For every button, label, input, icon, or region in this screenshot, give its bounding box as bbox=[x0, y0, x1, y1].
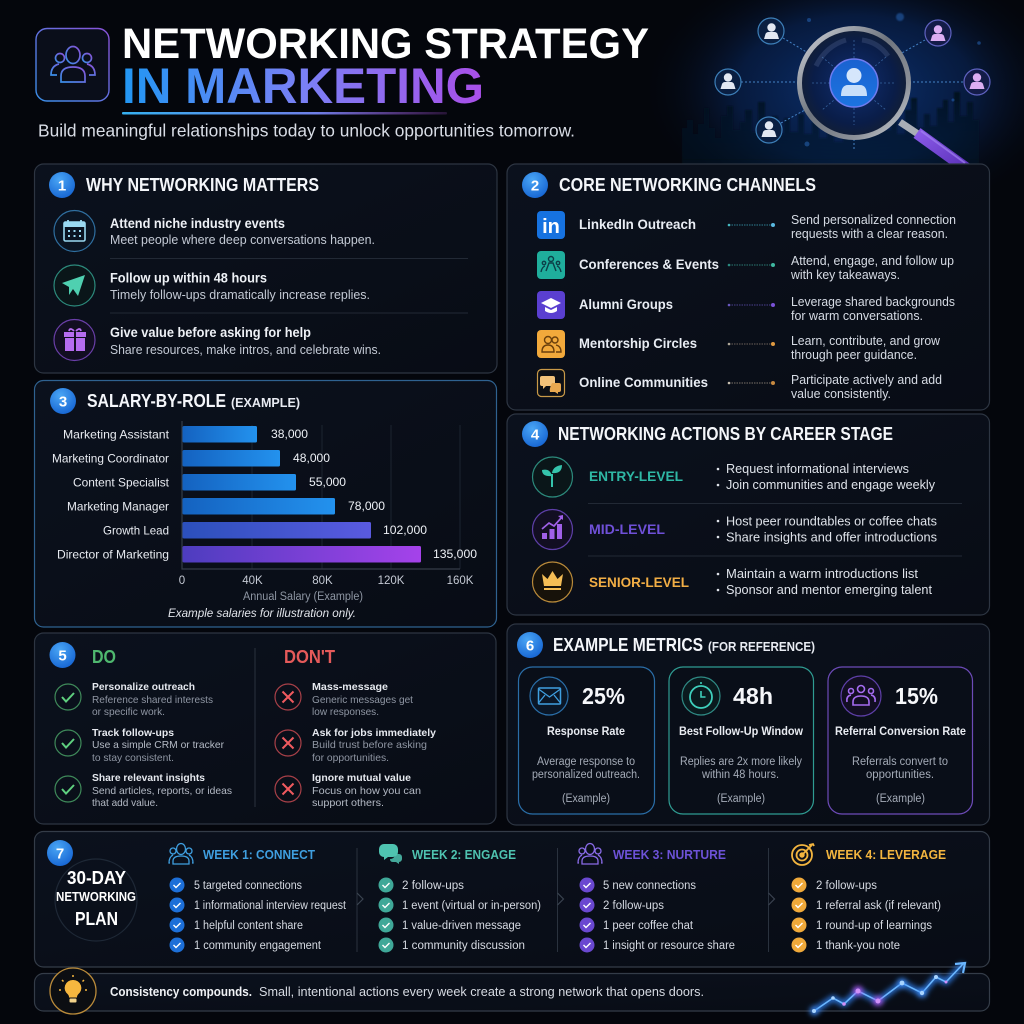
week 1 checklist: 1 informational interview request bbox=[194, 900, 347, 912]
do: share: Share relevant insights bbox=[92, 772, 205, 784]
week 3 checklist: 5 new connections bbox=[603, 880, 696, 892]
bullets: Join communities and engage weekly bbox=[726, 477, 935, 492]
week 3 checklist: 1 insight or resource share bbox=[603, 940, 735, 952]
week 1 column: WEEK 1: CONNECT bbox=[203, 848, 315, 862]
week 1 checklist: 5 targeted connections bbox=[194, 880, 302, 892]
row: mentorship: through peer guidance. bbox=[791, 348, 917, 362]
row: LinkedIn: requests with a clear reason. bbox=[791, 227, 948, 241]
metric card: follow-up window: Replies are 2x more likely bbox=[680, 756, 802, 768]
row: alumni bbox=[537, 291, 955, 323]
don't: mass message: Mass-message bbox=[312, 681, 388, 693]
week 3 checklist bbox=[580, 878, 735, 952]
badge 6 bbox=[517, 632, 543, 658]
heading: CORE NETWORKING CHANNELS bbox=[559, 175, 816, 195]
icon: people bbox=[169, 844, 193, 864]
heading line 2: IN MARKETING bbox=[122, 58, 484, 114]
panel 3: salary by role bbox=[34, 380, 496, 627]
row: entry level bbox=[532, 457, 935, 497]
item: attend events: Attend niche industry events bbox=[110, 216, 285, 231]
row: mentorship: Mentorship Circles bbox=[579, 335, 697, 351]
icon: target bbox=[792, 844, 814, 865]
icon: sprout bbox=[532, 457, 572, 497]
row: conferences: Conferences & Events bbox=[579, 256, 719, 272]
item: attend events bbox=[54, 210, 375, 252]
do list bbox=[55, 681, 232, 809]
don't: mass message: low responses. bbox=[312, 706, 379, 718]
metric card: follow-up window bbox=[669, 667, 814, 814]
icon: LinkedIn: in bbox=[542, 216, 560, 238]
metric card: follow-up window: Best Follow-Up Window bbox=[679, 724, 804, 738]
icon: referral group bbox=[841, 676, 881, 716]
badge 5 bbox=[50, 642, 76, 668]
item: give value bbox=[54, 320, 381, 360]
role labels bbox=[52, 428, 170, 562]
do: track: Track follow-ups bbox=[92, 727, 174, 739]
item: give value: Give value before asking for help bbox=[110, 325, 311, 340]
week 1 checklist bbox=[170, 878, 347, 952]
salary values bbox=[271, 427, 477, 561]
heading: EXAMPLE METRICS bbox=[553, 635, 703, 655]
week 4 column bbox=[792, 844, 946, 952]
bars bbox=[182, 426, 421, 562]
week 3 checklist: 2 follow-ups bbox=[603, 900, 664, 912]
item: follow up bbox=[54, 265, 370, 306]
salary values: 48,000 bbox=[293, 451, 330, 465]
row: conferences: Attend, engage, and follow up bbox=[791, 254, 954, 268]
week divider 3 bbox=[768, 848, 774, 952]
row: entry level: ENTRY-LEVEL bbox=[589, 468, 683, 484]
heading: WHY NETWORKING MATTERS bbox=[86, 175, 319, 195]
role labels: Content Specialist bbox=[73, 476, 170, 490]
rising trend line bbox=[810, 963, 965, 1015]
bullets: Host peer roundtables or coffee chats bbox=[726, 514, 937, 528]
metric card: response rate: Response Rate bbox=[547, 724, 625, 738]
plan emblem bbox=[55, 859, 137, 941]
week 1 checklist: 1 community engagement bbox=[194, 940, 322, 952]
week 2 checklist: 2 follow-ups bbox=[402, 880, 464, 892]
plan emblem: PLAN bbox=[75, 909, 118, 929]
takeaway text: Consistency compounds. bbox=[110, 984, 252, 999]
panel 6: example metrics bbox=[507, 624, 990, 825]
week 2 checklist: 1 community discussion bbox=[402, 940, 525, 952]
axis ticks: 80K bbox=[312, 575, 333, 587]
axis ticks bbox=[179, 575, 474, 587]
icon: gift bbox=[54, 320, 95, 360]
do: track bbox=[55, 727, 224, 764]
bullets: Maintain a warm introductions list bbox=[726, 566, 918, 581]
row: communities: Participate actively and add bbox=[791, 373, 942, 387]
bullets bbox=[717, 514, 937, 544]
icon: chat bubbles bbox=[538, 370, 564, 396]
row: mentorship bbox=[537, 330, 941, 362]
row: LinkedIn: LinkedIn Outreach bbox=[579, 216, 696, 232]
don't: ignore value: Focus on how you can bbox=[312, 785, 421, 797]
metric card: follow-up window: 48h bbox=[733, 683, 773, 709]
metric card: response rate: (Example) bbox=[562, 793, 610, 805]
heading: NETWORKING ACTIONS BY CAREER STAGE bbox=[558, 424, 893, 444]
icon: envelope bbox=[530, 677, 568, 715]
don't: mass message: Generic messages get bbox=[312, 694, 413, 706]
metric card: referral conversion: (Example) bbox=[876, 793, 925, 805]
chart note: Example salaries for illustration only. bbox=[168, 608, 356, 620]
title block bbox=[36, 20, 649, 140]
week 2 checklist: 1 value-driven message bbox=[402, 920, 521, 932]
metric card: referral conversion: Referrals convert to bbox=[852, 756, 948, 768]
plan emblem: 30-DAY bbox=[67, 868, 126, 888]
metric card: response rate bbox=[518, 667, 654, 814]
metric card: follow-up window: (Example) bbox=[717, 793, 765, 805]
icon: LinkedIn bbox=[537, 211, 565, 239]
axis title: Annual Salary (Example) bbox=[243, 591, 363, 603]
role labels: Marketing Assistant bbox=[63, 428, 170, 442]
heading bbox=[553, 635, 815, 655]
badge 3: 3 bbox=[59, 394, 67, 410]
metric card: response rate: personalized outreach. bbox=[532, 769, 640, 781]
bullets bbox=[717, 461, 935, 492]
item: follow up: Follow up within 48 hours bbox=[110, 270, 267, 286]
connector bbox=[728, 381, 775, 385]
week 4 checklist: 1 thank-you note bbox=[816, 940, 900, 952]
metric card: referral conversion bbox=[828, 667, 972, 814]
week 2 checklist: 1 event (virtual or in-person) bbox=[402, 900, 541, 912]
do: share: Send articles, reports, or ideas bbox=[92, 785, 232, 797]
icon: people bbox=[578, 844, 602, 864]
don't: ask for jobs bbox=[275, 727, 436, 764]
don't heading: DON'T bbox=[284, 647, 335, 667]
bullets: Share insights and offer introductions bbox=[726, 530, 937, 544]
bullets: Request informational interviews bbox=[726, 461, 909, 476]
icon: chat bubbles bbox=[379, 844, 402, 864]
week 3 checklist: 1 peer coffee chat bbox=[603, 920, 694, 932]
item: give value: Share resources, make intros, and celebrate wins. bbox=[110, 343, 381, 357]
panel 7: 30-day networking plan bbox=[34, 832, 990, 967]
metric card: referral conversion: Referral Conversion Rate bbox=[835, 724, 966, 738]
role labels: Director of Marketing bbox=[57, 548, 169, 562]
salary values: 55,000 bbox=[309, 475, 346, 489]
heading: SALARY-BY-ROLE bbox=[87, 391, 226, 411]
axis ticks: 0 bbox=[179, 575, 185, 587]
week 3 column: WEEK 3: NURTURE bbox=[613, 848, 726, 862]
plan emblem: NETWORKING bbox=[56, 890, 136, 904]
icon: lightbulb bbox=[50, 968, 96, 1014]
don't: ignore value: support others. bbox=[312, 797, 384, 809]
badge 7 bbox=[47, 840, 73, 866]
heading: (EXAMPLE) bbox=[231, 395, 300, 410]
badge 1: 1 bbox=[58, 178, 66, 194]
week 2 column bbox=[378, 844, 541, 952]
icon: calendar bbox=[54, 210, 95, 252]
axis ticks: 160K bbox=[447, 575, 474, 587]
badge 2: 2 bbox=[531, 178, 539, 194]
salary values: 135,000 bbox=[433, 547, 477, 561]
metric card: referral conversion: 15% bbox=[895, 683, 938, 709]
bar chart bbox=[52, 421, 477, 603]
week divider 2 bbox=[557, 848, 564, 952]
row: communities: Online Communities bbox=[579, 374, 708, 390]
do: share bbox=[55, 772, 232, 809]
badge 7: 7 bbox=[56, 846, 64, 862]
panel 4: actions by career stage bbox=[507, 414, 990, 615]
metric card: response rate: Average response to bbox=[537, 756, 635, 768]
connector bbox=[728, 263, 775, 267]
week 3 column bbox=[578, 844, 735, 952]
week 2 column: WEEK 2: ENGAGE bbox=[412, 848, 516, 862]
item: follow up: Timely follow-ups dramatically increase replies. bbox=[110, 288, 370, 302]
row: conferences: with key takeaways. bbox=[790, 268, 900, 282]
week 2 checklist bbox=[378, 878, 541, 952]
icon: paper plane bbox=[54, 265, 95, 306]
week 4 checklist: 1 referral ask (if relevant) bbox=[816, 900, 941, 912]
do heading: DO bbox=[92, 647, 116, 667]
don't: ignore value bbox=[275, 772, 421, 809]
row: alumni: for warm conversations. bbox=[791, 309, 923, 323]
icon: growth chart bbox=[532, 510, 572, 550]
footer banner bbox=[34, 963, 990, 1015]
metric card: referral conversion: opportunities. bbox=[866, 769, 934, 781]
bullets bbox=[717, 566, 932, 597]
title underline bbox=[122, 112, 447, 114]
panel 5: do and don't bbox=[34, 633, 496, 824]
row: LinkedIn bbox=[537, 211, 956, 241]
badge 5: 5 bbox=[58, 648, 67, 664]
don't list bbox=[275, 681, 436, 809]
takeaway text: Small, intentional actions every week create a strong network that opens doors. bbox=[259, 984, 704, 999]
week 1 column bbox=[169, 844, 347, 952]
bullets: Sponsor and mentor emerging talent bbox=[726, 582, 932, 597]
row: alumni: Alumni Groups bbox=[579, 296, 673, 312]
magnifier lens bbox=[800, 28, 908, 138]
do: personalize: or specific work. bbox=[92, 706, 165, 718]
metric card: response rate: 25% bbox=[582, 683, 625, 709]
row: mentorship: Learn, contribute, and grow bbox=[791, 334, 941, 348]
badge 4: 4 bbox=[531, 426, 540, 444]
week 1 checklist: 1 helpful content share bbox=[194, 920, 303, 932]
row: senior level bbox=[532, 562, 932, 602]
badge 2 bbox=[522, 172, 548, 198]
badge 4 bbox=[522, 421, 548, 447]
do: track: Use a simple CRM or tracker bbox=[92, 739, 224, 751]
don't: mass message bbox=[275, 681, 413, 718]
role labels: Marketing Manager bbox=[67, 500, 169, 514]
role labels: Growth Lead bbox=[103, 524, 169, 538]
salary values: 102,000 bbox=[383, 523, 427, 537]
connector bbox=[728, 303, 775, 307]
icon: stopwatch bbox=[682, 677, 720, 715]
badge 6: 6 bbox=[526, 638, 534, 654]
heading: (FOR REFERENCE) bbox=[708, 639, 815, 654]
row: mid level: MID-LEVEL bbox=[589, 521, 665, 537]
badge 3 bbox=[50, 388, 76, 414]
do: share: that add value. bbox=[92, 797, 158, 809]
connector bbox=[728, 342, 775, 346]
subtitle: Build meaningful relationships today to unlock opportunities tomorrow. bbox=[38, 120, 575, 140]
network connection lines bbox=[741, 30, 966, 150]
week divider 1 bbox=[356, 848, 363, 952]
magnifier handle bbox=[900, 122, 967, 169]
don't: ask for jobs: for opportunities. bbox=[312, 752, 389, 764]
role labels: Marketing Coordinator bbox=[52, 452, 169, 466]
icon: mentor people bbox=[537, 330, 565, 358]
row: alumni: Leverage shared backgrounds bbox=[791, 295, 955, 309]
row: communities bbox=[538, 370, 942, 401]
week 4 checklist: 2 follow-ups bbox=[816, 880, 877, 892]
salary values: 38,000 bbox=[271, 427, 308, 441]
network contacts bbox=[715, 18, 990, 143]
row: LinkedIn: Send personalized connection bbox=[791, 213, 956, 227]
don't: ask for jobs: Build trust before asking bbox=[312, 739, 427, 751]
hero illustration: magnifier over network bbox=[640, 0, 1024, 225]
axis ticks: 120K bbox=[378, 575, 405, 587]
do: personalize: Reference shared interests bbox=[92, 694, 213, 706]
salary values: 78,000 bbox=[348, 499, 385, 513]
connector bbox=[728, 223, 775, 227]
row: conferences bbox=[537, 251, 954, 282]
do: personalize: Personalize outreach bbox=[92, 681, 195, 693]
row: senior level: SENIOR-LEVEL bbox=[589, 574, 689, 590]
heading line 1: NETWORKING STRATEGY bbox=[122, 20, 649, 68]
row: communities: value consistently. bbox=[791, 387, 891, 401]
week 4 checklist: 1 round-up of learnings bbox=[816, 920, 932, 932]
item: attend events: Meet people where deep conversations happen. bbox=[110, 233, 375, 247]
icon: crown bbox=[532, 562, 572, 602]
do: personalize bbox=[55, 681, 213, 718]
panel 1: why networking matters bbox=[34, 164, 497, 373]
icon: graduation cap bbox=[537, 291, 565, 319]
do: track: to stay consistent. bbox=[92, 752, 174, 764]
don't: ask for jobs: Ask for jobs immediately bbox=[312, 727, 436, 739]
week 4 column: WEEK 4: LEVERAGE bbox=[826, 848, 946, 862]
icon: people group bbox=[36, 28, 109, 101]
row: mid level bbox=[532, 510, 937, 550]
badge 1 bbox=[49, 172, 75, 198]
don't: ignore value: Ignore mutual value bbox=[312, 772, 411, 784]
icon: conference bbox=[537, 251, 565, 279]
panel 2: core networking channels bbox=[507, 164, 990, 410]
week 4 checklist bbox=[792, 878, 941, 952]
metric card: follow-up window: within 48 hours. bbox=[701, 769, 779, 781]
axis ticks: 40K bbox=[242, 575, 263, 587]
